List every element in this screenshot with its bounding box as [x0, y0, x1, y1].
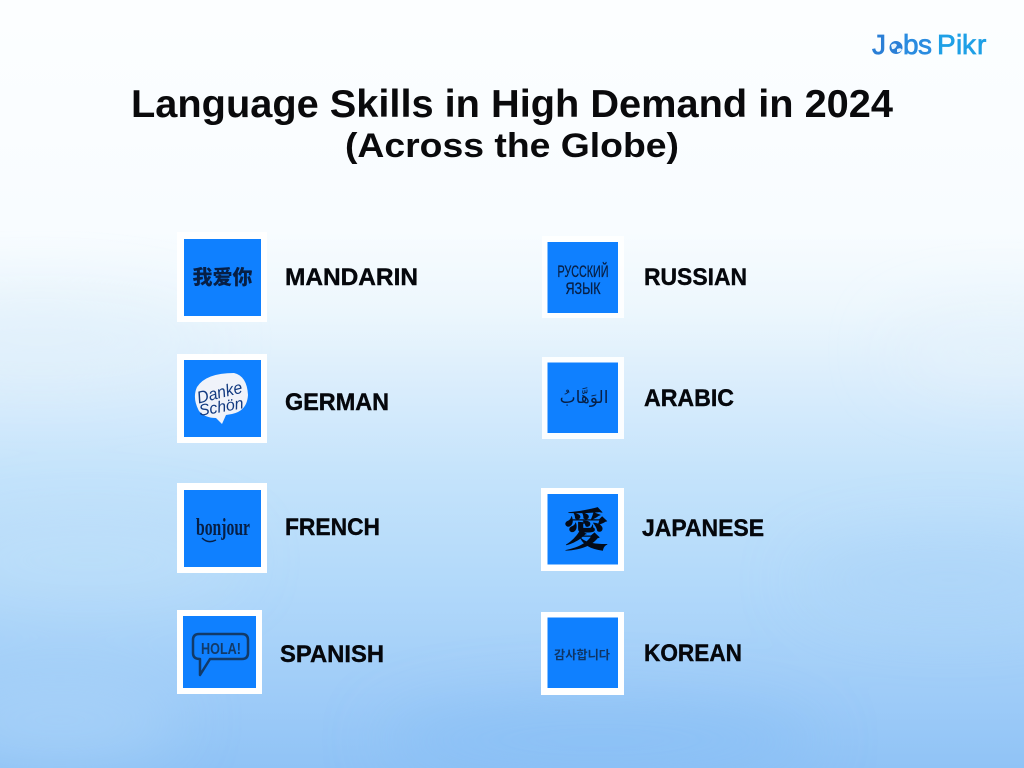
icon: Danke schon bubble: Danke	[195, 378, 244, 407]
label: Mandarin: MANDARIN	[285, 264, 418, 291]
icon: Danke schon bubble	[195, 373, 248, 424]
label: French: FRENCH	[285, 514, 380, 541]
item: French	[177, 483, 380, 573]
logo: JobsPikr: JobsPikr	[872, 29, 986, 60]
icon: Hola speech bubble: HOLA!	[201, 641, 241, 658]
label: Korean: KOREAN	[644, 640, 742, 667]
item: Mandarin	[177, 232, 418, 322]
icon: Russian phrase: РУССКИЙ	[558, 262, 608, 281]
label: Japanese: JAPANESE	[642, 515, 764, 542]
item: German	[177, 354, 389, 443]
item: Arabic	[542, 357, 734, 439]
icon: Russian phrase	[558, 262, 608, 298]
item: Spanish	[177, 610, 384, 694]
icon: Danke schon bubble: Schön	[198, 395, 245, 420]
icon: Mandarin phrase: 我爱你	[192, 261, 252, 290]
label: Russian: RUSSIAN	[644, 264, 747, 291]
label: Spanish: SPANISH	[280, 641, 384, 668]
icon: bonjour: bonjour	[196, 515, 250, 541]
icon: Arabic phrase: الوَهَّابُ	[560, 387, 608, 408]
icon: globe in logo	[890, 41, 902, 54]
icon: Russian phrase: ЯЗЫК	[566, 279, 601, 298]
title: Language Skills in High Demand in 2024	[131, 83, 893, 126]
item: Russian	[542, 236, 747, 318]
item: Korean	[541, 612, 742, 695]
label: German: GERMAN	[285, 389, 389, 416]
icon: Korean phrase: 감사합니다	[554, 646, 610, 663]
title: (Across the Globe)	[345, 127, 679, 165]
icon: Japanese character: 愛	[563, 494, 609, 559]
icon: bonjour	[196, 515, 250, 542]
label: Arabic: ARABIC	[644, 385, 734, 412]
icon: Hola speech bubble	[193, 634, 248, 675]
title	[131, 83, 893, 165]
item: Japanese	[541, 488, 764, 571]
